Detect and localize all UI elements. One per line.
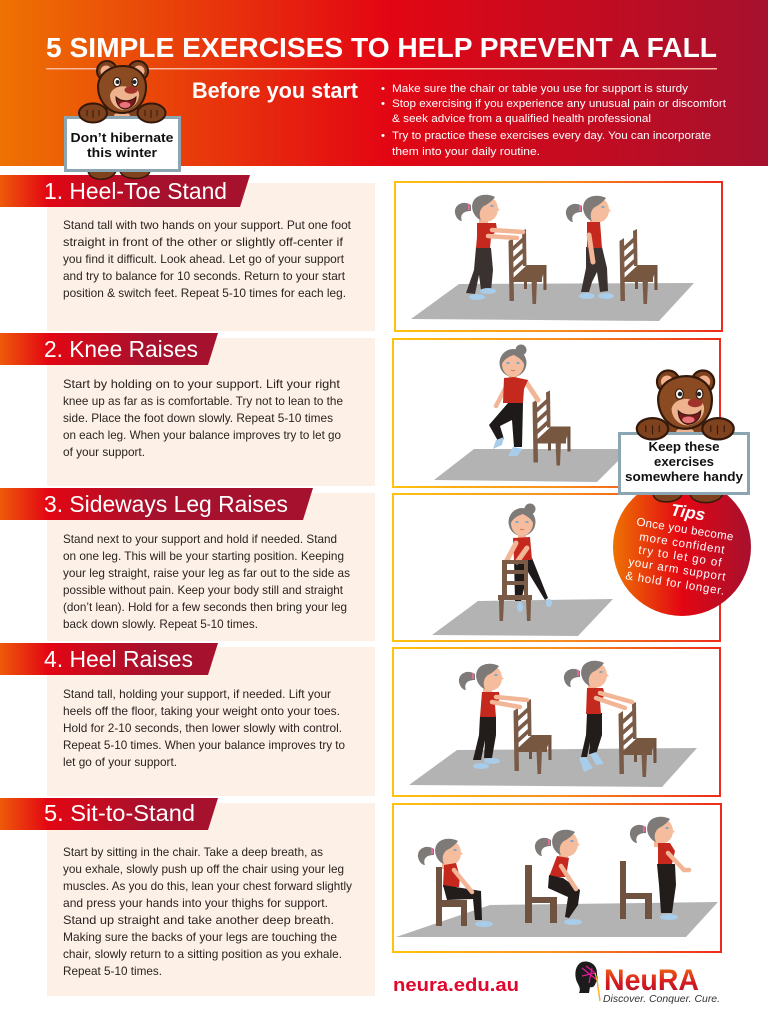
instructions 1: position & switch feet. Repeat 5-10 times for each leg. <box>63 287 346 300</box>
sign <box>620 434 748 494</box>
instructions 1: and try to balance for 10 seconds. Return to your start <box>63 270 346 283</box>
instructions 4: Repeat 5-10 times. When your balance improves try to <box>63 739 345 752</box>
illustration panel: sit-to-stand <box>393 804 721 952</box>
illustration panel: heel-toe stand <box>395 182 722 331</box>
bear with sign: keep these exercises: somewhere handy <box>625 470 743 484</box>
heading: sideways leg raises: 3. Sideways Leg Raises <box>44 491 288 517</box>
instructions 2: knee up as far as is comfortable. Try not to lean to the <box>63 395 343 408</box>
before you start bullets: Try to practice these exercises every day. You can incorporate <box>392 130 711 142</box>
instructions 4: Hold for 2-10 seconds, then lower slowly with control. <box>63 722 342 735</box>
instructions 3: back down slowly. Repeat 5-10 times. <box>63 618 258 631</box>
before you start bullets <box>381 83 727 158</box>
instructions 5: Repeat 5-10 times. <box>63 965 162 978</box>
instructions 1: you find it difficult. Look ahead. Let go of your support <box>63 253 345 266</box>
bear with sign: keep these exercises: exercises <box>654 455 714 469</box>
instructions 4: let go of your support. <box>63 756 177 769</box>
instructions 1: straight in front of the other or slightly off-center if <box>63 236 344 249</box>
instructions 2: on each leg. When your balance improves try to let go <box>63 429 341 442</box>
before you start bullets: Make sure the chair or table you use for support is sturdy <box>392 83 688 95</box>
heading: heel raises <box>0 643 218 675</box>
sign <box>66 118 180 170</box>
bear with sign: keep these exercises: Keep these <box>648 440 720 454</box>
bear with sign: don't hibernate: this winter <box>87 146 157 160</box>
heading: knee raises <box>0 333 218 365</box>
before you start bullets: Stop exercising if you experience any unusual pain or discomfort <box>392 98 727 110</box>
instructions 1: Stand tall with two hands on your support. Put one foot <box>63 219 352 232</box>
panel: heel raises text <box>0 643 375 796</box>
tips text: & hold for longer. <box>625 569 725 598</box>
instructions 5 <box>63 846 352 978</box>
illustration panel: knee raises <box>393 339 720 487</box>
heading: sideways leg raises <box>0 488 313 520</box>
figure: woman raising leg sideways behind chair <box>498 504 552 621</box>
before you start bullets: & seek advice from a qualified health professional <box>392 113 651 125</box>
bear with sign: don't hibernate <box>66 61 180 179</box>
bear with sign: keep these exercises <box>620 371 748 503</box>
instructions 5: Making sure the backs of your legs are touching the <box>63 931 337 944</box>
panel: knee raises text <box>0 333 375 486</box>
NeuRA logo: Discover. Conquer. Cure. <box>603 993 720 1005</box>
before you start bullets: them into your daily routine. <box>392 146 540 158</box>
panel: sit-to-stand text <box>0 798 375 996</box>
tips text: more confident <box>638 530 726 557</box>
instructions 5: Start by sitting in the chair. Take a deep breath, as <box>63 846 323 859</box>
instructions 5: Stand up straight and take another deep breath. <box>63 914 334 927</box>
instructions 3: (don’t lean). Hold for a few seconds then bring your leg <box>63 601 347 614</box>
instructions 5: muscles. As you do this, lean your chest forward slightly <box>63 880 352 893</box>
website url: neura.edu.au <box>393 975 519 995</box>
instructions 2: Start by holding on to your support. Lift your right <box>63 378 341 391</box>
NeuRA logo: NeuRA <box>604 964 699 997</box>
before you start heading: Before you start <box>192 78 359 103</box>
bear with sign: don't hibernate: Don’t hibernate <box>70 131 174 145</box>
heading: knee raises: 2. Knee Raises <box>44 336 198 362</box>
figure: woman rising <box>525 830 582 925</box>
instructions 4: heels off the floor, taking your weight onto your toes. <box>63 705 340 718</box>
instructions 4 <box>63 688 345 769</box>
figure: woman holding chair <box>455 195 546 304</box>
panel: sideways leg raises text <box>0 488 375 641</box>
instructions 2 <box>63 378 343 459</box>
heading: heel raises: 4. Heel Raises <box>44 646 193 672</box>
figure: woman raising knee <box>489 344 570 466</box>
heading: sit-to-stand <box>0 798 218 830</box>
figure: woman flat feet at chair <box>459 664 552 774</box>
tips text: try to let go of <box>637 544 723 570</box>
heading: sit-to-stand: 5. Sit-to-Stand <box>44 800 195 826</box>
instructions 4: Stand tall, holding your support, if needed. Lift your <box>63 688 331 701</box>
illustration panel: heel raises <box>393 648 720 796</box>
instructions 3 <box>63 533 350 631</box>
tips text <box>625 515 734 598</box>
illustration panel: sideways leg raises <box>393 494 720 641</box>
figure: woman standing <box>620 817 689 920</box>
tips heading: Tips <box>669 500 707 525</box>
instructions 5: chair, slowly return to a sitting position as you exhale. <box>63 948 342 961</box>
instructions 5: and press your hands into your thighs for support. <box>63 897 328 910</box>
instructions 3: your leg straight, raise your leg as far out to the side as <box>63 567 350 580</box>
panel: heel-toe stand text <box>0 175 375 331</box>
instructions 2: of your support. <box>63 446 145 459</box>
before you start bullets: • <box>381 98 385 110</box>
figure: woman balancing heel to toe <box>566 196 658 304</box>
instructions 2: side. Place the foot down slowly. Repeat 5-10 times <box>63 412 333 425</box>
instructions 5: you exhale, slowly push up off the chair using your leg <box>63 863 344 876</box>
instructions 1 <box>63 219 352 300</box>
instructions 3: on one leg. This will be your starting position. Keeping <box>63 550 344 563</box>
heading: heel-toe stand <box>0 175 250 207</box>
instructions 3: possible without pain. Keep your body still and straight <box>63 584 344 597</box>
before you start bullets: • <box>381 130 385 142</box>
header banner <box>0 0 768 166</box>
instructions 3: Stand next to your support and hold if needed. Stand <box>63 533 337 546</box>
NeuRA logo <box>575 962 720 1005</box>
tips circle <box>613 478 751 616</box>
title: 5 SIMPLE EXERCISES TO HELP PREVENT A FALL <box>46 32 717 63</box>
before you start bullets: • <box>381 83 385 95</box>
icon: head silhouette <box>575 962 600 1001</box>
figure: woman on tiptoes at chair <box>564 661 656 777</box>
figure: woman seated <box>418 839 493 927</box>
tips text: Once you become <box>636 515 734 544</box>
heading: heel-toe stand: 1. Heel-Toe Stand <box>44 178 227 204</box>
tips text: your arm support <box>628 555 727 584</box>
